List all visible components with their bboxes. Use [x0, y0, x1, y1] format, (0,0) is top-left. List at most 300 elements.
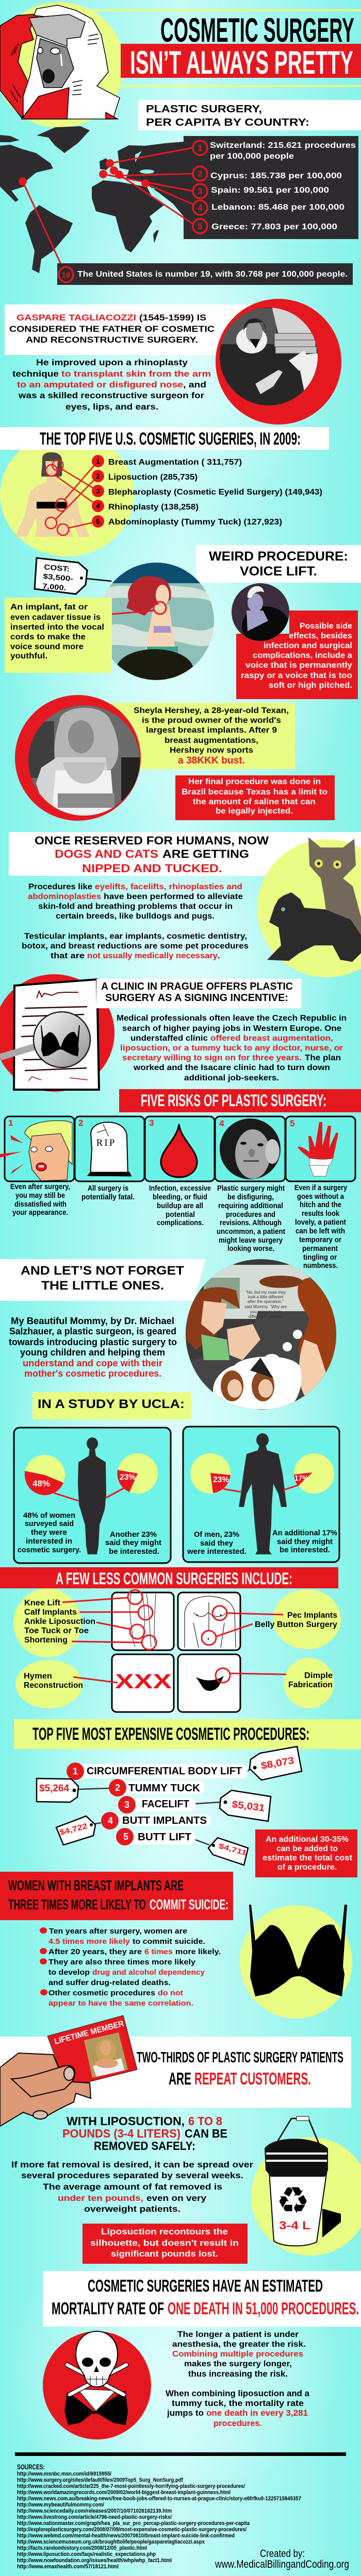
- illustration: My Beautiful Mommy book page: different?" I asked.: [249, 1314, 283, 1319]
- illustration: membership card: LIFETIME MEMBER: [54, 2019, 125, 2046]
- risk captions: numbness.: [303, 1262, 338, 1270]
- woman silhouette: [78, 1437, 106, 1554]
- illustration: cat and dog: [257, 837, 361, 977]
- risk 4 icon: disfigured face: [220, 1118, 281, 1179]
- list: expensive procedures: FACELIFT: [142, 1799, 189, 1810]
- list: suicide facts: They are also three times more likely: [48, 1958, 196, 1967]
- text: Tagliacozzi bio: eyes, lips, and ears.: [65, 402, 158, 412]
- panel: side effects: [236, 611, 358, 699]
- surgery labels: Dimple: [304, 1671, 333, 1680]
- surgery labels: [24, 1599, 337, 1690]
- risk 5 icon: numb hand: [298, 1122, 338, 1176]
- list: suicide facts: to commit suicide.: [133, 1937, 205, 1946]
- text: Tagliacozzi bio: to an amputated or disfigured nose: [17, 380, 183, 389]
- list: suicide facts: [40, 1927, 221, 2008]
- callout: liposuction recontours: [83, 2224, 248, 2264]
- heading: voice lift: VOICE LIFT.: [240, 564, 317, 579]
- callout: extra cost: can be added to: [276, 1844, 338, 1853]
- callout: extra cost: An additional 30-35%: [266, 1835, 349, 1844]
- decorative title rules: [92, 9, 361, 87]
- heading: pets: ARE GETTING: [162, 848, 249, 860]
- credit: [215, 2548, 349, 2570]
- men captions: be interested.: [280, 1546, 330, 1554]
- callout: United States rank: [57, 263, 353, 285]
- illustration: My Beautiful Mommy book page: look a little different: [248, 1295, 284, 1299]
- illustration: hand holding card: [0, 2053, 91, 2126]
- risk captions: requiring additional: [218, 1202, 283, 1210]
- pie: 23 percent: [117, 1453, 158, 1494]
- text: Tagliacozzi bio: was a skilled reconstructive surgeon for: [18, 391, 204, 400]
- text: anesthesia risk: [166, 2330, 310, 2428]
- text: pet procedures: certain breeds, like bulldogs and pugs.: [56, 912, 215, 921]
- panel: side effects: complications, include a: [253, 651, 352, 660]
- top five yellow circle: [0, 433, 134, 556]
- panel: repeat customers: [0, 2037, 351, 2108]
- list: expensive procedures: 1: [73, 1766, 78, 1776]
- text: My Beautiful Mommy: mother's cosmetic procedures.: [24, 1368, 161, 1379]
- risk captions: you may still be: [15, 1192, 65, 1200]
- sources list: http://www.liposuction.com/faqs/realistic_expectations.php: [17, 2551, 156, 2557]
- heading: suicide risk: THREE TIMES MORE LIKELY TO: [8, 1896, 146, 1912]
- callout: Sheyla Hershey: largest breast implants. After 9: [146, 726, 277, 735]
- panel: Tagliacozzi heading: (1545-1599) IS: [139, 313, 206, 323]
- list: suicide facts: Other cosmetic procedures: [48, 1989, 155, 1997]
- risk panels: [5, 1116, 355, 1181]
- heading: Prague clinic: SURGERY AS A SIGNING INCENTIVE:: [105, 992, 288, 1004]
- risk captions: be disfiguring,: [227, 1193, 274, 1201]
- text: anesthesia risk: procedures.: [214, 2418, 262, 2428]
- risk captions: procedures and: [226, 1211, 275, 1219]
- panel: country ranking: per 100,000 people: [210, 152, 294, 161]
- women captions: Another 23%: [110, 1530, 157, 1539]
- text: My Beautiful Mommy: understand and cope with their: [23, 1358, 162, 1368]
- surgery labels: Belly Button Surgery: [255, 1620, 337, 1629]
- heading: Prague clinic: [96, 979, 301, 1008]
- callout: implant description: cords to make the: [10, 633, 86, 641]
- heading: Prague clinic: A CLINIC IN PRAGUE OFFERS PLASTIC: [101, 981, 293, 992]
- panel: country ranking: [184, 136, 358, 239]
- sources list: http://www.news.com.au/breaking-news/free-boob-jobs-offered-to-nurses-at-prague-clinic/story-e6frfku0-1225715845357: [17, 2496, 301, 2502]
- illustration: My Beautiful Mommy book page: after the operation,": [248, 1299, 284, 1304]
- callout: implant description: even cadaver tissue is: [10, 613, 101, 622]
- text: Prague clinic story: [117, 1014, 347, 1082]
- sources list: http://www.msnbc.msn.com/id/6915955/: [17, 2471, 111, 2477]
- text: Tagliacozzi bio: He improved upon a rhinoplasty: [36, 358, 188, 367]
- panel: Brazil note: be legally injected.: [216, 807, 293, 816]
- callout: Sheyla Hershey: Sheyla Hershey, a 28-year-old Texan,: [134, 706, 289, 715]
- text: fat removal: even on very: [146, 2193, 207, 2203]
- illustration: crying woman: [0, 5, 120, 119]
- panel: Brazil note: Her final procedure was done in: [188, 777, 321, 786]
- panel: side effects: voice that is permanently: [245, 661, 352, 670]
- surgery labels: Knee Lift: [24, 1599, 61, 1607]
- price tag: body lift: [250, 1747, 302, 1780]
- illustration: body with markers: [15, 452, 90, 537]
- pie: men 17 percent: [294, 1453, 334, 1494]
- list: top five surgeries: Liposuction (285,735): [108, 473, 198, 482]
- heading: little ones: THE LITTLE ONES.: [41, 1279, 164, 1293]
- text: Prague clinic story: liposuction, or a tummy tuck to any doctor, nurse, or: [120, 1044, 343, 1053]
- illustration: trash can: 3-4 L: [279, 2219, 310, 2232]
- list: top five surgeries: 5: [96, 517, 100, 526]
- heading: pets: ONCE RESERVED FOR HUMANS, NOW: [35, 834, 269, 847]
- list: top five surgeries: 1: [96, 457, 100, 465]
- portrait: Tagliacozzi: [216, 299, 341, 425]
- illustration: trash can: ♻: [276, 2179, 309, 2222]
- callout: Sheyla Hershey: [110, 703, 295, 769]
- women captions: cosmetic surgery.: [18, 1546, 81, 1554]
- panel: women: [14, 1428, 171, 1563]
- heading: mortality: MORTALITY RATE OF: [52, 2299, 164, 2318]
- list: suicide facts: more likely.: [175, 1947, 221, 1956]
- panel: country ranking: Greece: 77.803 per 100,000: [211, 223, 337, 231]
- pie connectors: [54, 1488, 124, 1501]
- pie: 48 percent: 48%: [32, 1479, 50, 1488]
- rank badges: 2: [198, 169, 203, 179]
- list: top five surgeries: Blepharoplasty (Cosmetic Eyelid Surgery) (149,943): [108, 488, 322, 497]
- list: suicide facts: do not: [158, 1989, 183, 1997]
- heading: pets: NIPPED AND TUCKED.: [82, 862, 222, 875]
- heading: voice lift: WEIRD PROCEDURE:: [209, 549, 348, 564]
- risk captions: your appearance.: [12, 1209, 68, 1217]
- heading: per capita: [138, 100, 361, 130]
- heading: less common surgeries: [0, 1567, 338, 1588]
- sources list: http://www.webmd.com/mental-health/news/20070810/breast-implant-suicide-link-confirmed: [17, 2533, 235, 2539]
- illustration: My Beautiful Mommy book page: [186, 1259, 338, 1410]
- risk captions: dissatisfied with: [14, 1200, 67, 1209]
- text: fat removal: overweight patients.: [84, 2204, 180, 2214]
- pie: 23 percent: 23%: [120, 1473, 136, 1482]
- list: expensive procedures: BUTT IMPLANTS: [122, 1815, 207, 1826]
- pie: 48 percent: [25, 1455, 65, 1495]
- list: suicide facts: and suffer drug-related deaths.: [48, 1978, 171, 1987]
- heading: liposuction: 6 TO 8: [188, 2114, 222, 2128]
- text: anesthesia risk: jumps to: [167, 2408, 204, 2418]
- list: suicide facts: appear to have the same correlation.: [48, 1999, 193, 2008]
- sources list: http://www.surgery.org/sites/default/files/2009Top5_Surg_NonSurg.pdf: [17, 2477, 183, 2483]
- illustration: bra: [240, 1905, 352, 2019]
- women captions: be interested.: [109, 1547, 159, 1556]
- surgery labels: Calf Implants: [24, 1608, 77, 1617]
- callout: United States rank: The United States is number 19, with 30.768 per 100,000 people.: [77, 270, 348, 279]
- price tag: butt implants: $4,722: [59, 1822, 88, 1837]
- men captions: [187, 1529, 337, 1556]
- list: expensive procedures: BUTT LIFT: [138, 1832, 191, 1843]
- risk captions: revisions. Although: [220, 1219, 282, 1227]
- list: suicide facts: Ten years after surgery, women are: [49, 1927, 187, 1936]
- surgery labels: Pec Implants: [287, 1611, 337, 1620]
- panel: country ranking: Cyprus: 185.738 per 100,000: [210, 172, 342, 180]
- text: My Beautiful Mommy: young children and helping them: [20, 1347, 165, 1358]
- panel: repeat customers: ARE: [169, 2069, 191, 2088]
- price tag: tummy tuck: $5,264: [39, 1783, 69, 1794]
- sources list: http://www.mybeautifulmommy.com/: [17, 2502, 104, 2508]
- callout: liposuction recontours: significant pounds lost.: [111, 2249, 218, 2259]
- sources list: http://www.nationmaster.com/graph/hea_pla_sur_pro_percap-plastic-surgery-procedures-per-capita: [17, 2520, 250, 2527]
- heading: little ones: AND LET’S NOT FORGET: [21, 1264, 184, 1278]
- sources list: http://www.sciencedaily.com/releases/2007/10/071026162139.htm: [17, 2508, 172, 2514]
- list: top five surgeries: Rhinoplasty (138,258): [108, 503, 199, 512]
- men captions: said they: [200, 1539, 234, 1548]
- throat marker: [112, 602, 166, 614]
- men captions: Of men, 23%: [194, 1530, 239, 1539]
- sources list: http://facts.randomhistory.com/2008/12/05_plastic.html: [17, 2545, 147, 2551]
- heading: little ones: [0, 1259, 206, 1301]
- illustration: My Beautiful Mommy book page: you going to look: [250, 1310, 282, 1314]
- panel: Brazil note: the amount of saline that can: [193, 798, 316, 806]
- heading: UCLA study: [32, 1392, 191, 1419]
- sources list: http://www.emaxhealth.com/57/18121.html: [17, 2564, 119, 2570]
- markers and connectors: [45, 460, 98, 535]
- text: pet procedures: .: [218, 952, 220, 960]
- surgery labels: Toe Tuck or Toe: [24, 1626, 89, 1635]
- portrait: Sheyla Hershey: [15, 695, 142, 821]
- list: expensive procedures: 4: [108, 1816, 113, 1826]
- price tag: body lift: $8,073: [260, 1755, 295, 1772]
- list: expensive procedures: 3: [124, 1800, 129, 1810]
- tag connectors: [78, 1769, 251, 1845]
- panel numbers: 1: [8, 1118, 13, 1128]
- credit: Created by:: [260, 2548, 305, 2560]
- callout: implant description: inserted into the vocal: [10, 623, 104, 632]
- risk 1 icon: shocked woman: [0, 1121, 72, 1181]
- price tag: facelift: [220, 1790, 271, 1821]
- panel: Brazil note: Brazil because Texas has a limit to: [182, 788, 327, 796]
- panel: legs: [112, 1592, 174, 1650]
- risk captions: looking worse.: [227, 1245, 274, 1253]
- women captions: surveyed said: [25, 1519, 74, 1528]
- panel: Tagliacozzi heading: CONSIDERED THE FATHER OF COSMETIC: [9, 324, 215, 334]
- heading: per capita: PER CAPITA BY COUNTRY:: [146, 117, 309, 128]
- men captions: said they might: [277, 1537, 333, 1546]
- heading: per capita: PLASTIC SURGERY,: [146, 104, 262, 115]
- risk captions: Plastic surgery might: [217, 1184, 285, 1193]
- sources list: http://www.livestrong.com/article/4796-need-plastic-surgery-risks/: [17, 2514, 172, 2520]
- heading: liposuction: REMOVED SAFELY:: [94, 2139, 195, 2153]
- risk captions: results look: [302, 1210, 340, 1218]
- risk captions: permanent: [302, 1245, 338, 1253]
- list: expensive procedures: [67, 1762, 248, 1845]
- heading: pets: [9, 832, 361, 876]
- risk captions: hitch and the: [300, 1201, 341, 1209]
- risk 2 icon: tombstone: [89, 1122, 130, 1176]
- text: pet procedures: Testicular implants, ear implants, cosmetic dentistry,: [24, 932, 247, 941]
- pie: men 23 percent: 23%: [213, 1476, 229, 1484]
- callout: implant description: [5, 598, 112, 673]
- heading: liposuction: POUNDS (3-4 LITERS): [62, 2127, 180, 2140]
- heading: mortality: [43, 2271, 361, 2327]
- callout: extra cost: [255, 1829, 357, 1877]
- risk captions: tingling or: [303, 1253, 337, 1262]
- risk 2 icon: tombstone: RIP: [96, 1138, 116, 1148]
- panel: Tagliacozzi heading: [5, 304, 251, 355]
- text: Prague clinic story: search of higher paying jobs in Western Europe. One: [122, 1024, 341, 1033]
- list: top five surgeries: 2: [96, 472, 100, 480]
- sources list: http://www.nowfoundation.org/issues/health/whp/whp_fact1.html: [17, 2557, 172, 2564]
- heading: suicide risk: WOMEN WITH BREAST IMPLANTS ARE: [8, 1877, 184, 1893]
- illustration: trash can: [251, 2116, 361, 2256]
- risk captions: might leave surgery: [219, 1236, 283, 1245]
- text: pet procedures: that are: [51, 952, 85, 960]
- panel: torso: [178, 1592, 240, 1650]
- text: My Beautiful Mommy: towards introducing plastic surgery to: [9, 1337, 177, 1347]
- callout: United States rank: 19: [62, 271, 70, 280]
- panel numbers: 5: [290, 1118, 294, 1128]
- text: My Beautiful Mommy: Salzhauer, a plastic surgeon, is geared: [9, 1326, 176, 1336]
- text: pet procedures: skin-fold and breathing problems that occur in: [38, 902, 233, 911]
- panel: Brazil note: [175, 775, 335, 820]
- risk captions: All surgery is: [88, 1184, 128, 1193]
- callout: Sheyla Hershey: breast augmentations,: [165, 736, 258, 745]
- panel: side effects: infection and surgical: [264, 641, 352, 650]
- man silhouette: [239, 1433, 287, 1554]
- women captions: interested in: [26, 1537, 72, 1546]
- price tag: voice lift cost: $3,500-: [43, 572, 74, 583]
- callout: Sheyla Hershey: is the proud owner of the world's: [142, 716, 281, 725]
- panel: country ranking: Switzerland: 215.621 procedures: [210, 141, 356, 150]
- sources list: http://www.sciencemuseum.org.uk/broughttolife/people/gasparetagliacozzi.aspx: [17, 2539, 205, 2545]
- panel: side effects: effects, besides: [289, 632, 352, 640]
- text: Tagliacozzi bio: [12, 358, 211, 412]
- yellow label bubbles: [13, 1588, 341, 1708]
- text: pet procedures: abdominoplasties: [28, 892, 101, 901]
- text: anesthesia risk: one death in every 3,281: [206, 2408, 308, 2418]
- panel: Tagliacozzi heading: AND RECONSTRUCTIVE SURGERY.: [26, 335, 198, 345]
- price tag: butt lift: $4,711: [218, 1841, 248, 1857]
- heading: UCLA study: IN A STUDY BY UCLA:: [38, 1397, 185, 1411]
- heading: suicide risk: COMMIT SUICIDE:: [150, 1896, 228, 1912]
- heading: liposuction: [62, 2114, 227, 2153]
- price tag: butt lift: [208, 1838, 248, 1865]
- heading: liposuction: CAN BE: [185, 2127, 227, 2140]
- list: suicide facts: After 20 years, they are: [48, 1947, 142, 1956]
- text: Prague clinic story: secretary willing to sign on for three years.: [122, 1054, 302, 1062]
- sources list: SOURCES:: [17, 2463, 45, 2471]
- header yellow circle: [0, 2, 124, 128]
- surgery labels: Reconstruction: [24, 1681, 83, 1690]
- illustration: membership card: [47, 2015, 137, 2088]
- list: top five surgeries: Breast Augmentation ( 311,757): [108, 458, 242, 467]
- heading: suicide risk: [0, 1872, 233, 1920]
- text: My Beautiful Mommy: [9, 1316, 177, 1379]
- callout: liposuction recontours: Liposuction recontours the: [101, 2227, 228, 2236]
- panel: men: [183, 1427, 339, 1562]
- pie: men 17 percent: 17%: [294, 1474, 308, 1483]
- text: anesthesia risk: tummy tuck, the mortality rate: [172, 2398, 304, 2408]
- text: Prague clinic story: understaffed clinic: [130, 1034, 208, 1043]
- price tag: tummy tuck: [37, 1778, 78, 1802]
- surgery labels: Fabrication: [288, 1681, 333, 1689]
- text: anesthesia risk: makes the surgery longer,: [184, 2360, 292, 2368]
- text: Prague clinic story: offered breast augmentation,: [210, 1034, 333, 1043]
- heading: liposuction: WITH LIPOSUCTION,: [67, 2114, 185, 2128]
- text: fat removal: If more fat removal is desired, it can be spread over: [11, 2160, 253, 2170]
- sources list: [17, 2463, 301, 2570]
- pie: men 23 percent: [190, 1453, 231, 1494]
- price tag: butt implants: [56, 1816, 95, 1845]
- rank badges: 5: [198, 222, 203, 231]
- text: pet procedures: [22, 883, 249, 960]
- callout: implant description: voice sound more: [10, 642, 84, 651]
- text: anesthesia risk: anesthesia, the greater the risk.: [172, 2340, 306, 2349]
- text: pet procedures: not usually medically necessary: [87, 952, 218, 960]
- illustration: contract under magnifier: [0, 974, 114, 1092]
- surgery labels: Hymen: [24, 1672, 52, 1681]
- text: fat removal: several procedures separated by several weeks.: [21, 2171, 243, 2180]
- panel: side effects: raspy or a voice that is too: [241, 671, 352, 680]
- text: pet procedures: botox, and breast reductions are some pet procedures: [22, 942, 249, 951]
- illustration: My Beautiful Mommy book page: "No, but my nose may: [245, 1290, 286, 1295]
- list: top five surgeries: [92, 455, 322, 528]
- sources list: http://www.cracked.com/article/225_the-7-most-pointlessly-horrifying-plastic-surgery-procedures/: [17, 2483, 245, 2489]
- risk captions: potentially fatal.: [81, 1193, 135, 1201]
- callout: Sheyla Hershey: a 38KKK bust.: [178, 755, 245, 766]
- men captions: were interested.: [187, 1547, 247, 1556]
- illustration: Ursula: [232, 583, 289, 646]
- panel numbers: [8, 1118, 294, 1128]
- heading: voice lift: [196, 545, 361, 583]
- text: fat removal: [11, 2160, 253, 2214]
- women captions: they were: [31, 1528, 67, 1537]
- illustration: Ariel circle: [103, 563, 214, 680]
- text: Prague clinic story: additional job-seekers.: [184, 1074, 279, 1082]
- illustration: skull and crossbones with bra: [43, 2331, 151, 2439]
- text: Prague clinic story: Medical professionals often leave the Czech Republic in: [117, 1014, 347, 1023]
- heading: most expensive: [14, 1719, 361, 1749]
- callout: extra cost: of a procedure.: [277, 1863, 337, 1872]
- list: expensive procedures: TUMMY TUCK: [128, 1783, 201, 1794]
- list: top five surgeries: Abdominoplasty (Tummy Tuck) (127,923): [108, 518, 282, 527]
- panel: XXX: XXX: [115, 1670, 172, 1693]
- callout: liposuction recontours: silhouette, but doesn't result in: [90, 2238, 239, 2248]
- text: fat removal: under ten pounds,: [58, 2193, 143, 2203]
- list: suicide facts: drug and alcohol dependency: [92, 1968, 205, 1977]
- surgery labels: Ankle Liposuction: [24, 1617, 95, 1626]
- text: pet procedures: have been performed to alleviate: [104, 892, 243, 901]
- list: top five surgeries: 4: [96, 502, 100, 510]
- surgery labels: Shortening: [24, 1636, 68, 1645]
- women captions: [18, 1511, 161, 1556]
- text: fat removal: The average amount of fat removed is: [43, 2182, 222, 2192]
- text: Tagliacozzi bio: , and: [183, 380, 206, 389]
- panel: side effects: soft or high pitched.: [269, 681, 352, 690]
- panel: XXX: [112, 1654, 174, 1712]
- risk captions: can be left with: [296, 1227, 345, 1235]
- rank badges: [193, 141, 207, 233]
- list: suicide facts: 4.5 times more likely: [48, 1937, 130, 1946]
- panel: dimple smile: [178, 1654, 240, 1712]
- risk captions: complications.: [157, 1219, 204, 1227]
- risk captions: Even after surgery,: [10, 1183, 70, 1191]
- women captions: said they might: [105, 1538, 161, 1547]
- price tag: voice lift cost: [35, 558, 111, 594]
- text: pet procedures: Procedures like: [28, 883, 92, 891]
- text: My Beautiful Mommy: My Beautiful Mommy, by Dr. Michael: [11, 1316, 174, 1326]
- text: pet procedures: eyelifts, facelifts, rhinoplasties and: [95, 883, 242, 891]
- callout: Sheyla Hershey: Hershey now sports: [170, 746, 253, 755]
- text: Tagliacozzi bio: to transplant skin from the arm: [61, 369, 211, 379]
- risk captions: uncommon, a patient: [217, 1228, 285, 1236]
- callout: extra cost: estimate the total cost: [262, 1854, 353, 1862]
- list: top five surgeries: 3: [96, 487, 100, 495]
- text: anesthesia risk: Combining multiple procedures: [172, 2350, 303, 2359]
- risk captions: buildup are all: [157, 1202, 203, 1210]
- panel: Tagliacozzi heading: GASPARE TAGLIACOZZI: [17, 313, 136, 323]
- list: expensive procedures: 2: [115, 1783, 120, 1793]
- rank badges: 4: [198, 203, 203, 213]
- panel: country ranking: Lebanon: 85.468 per 100,000: [211, 203, 344, 212]
- risk captions: [10, 1183, 347, 1270]
